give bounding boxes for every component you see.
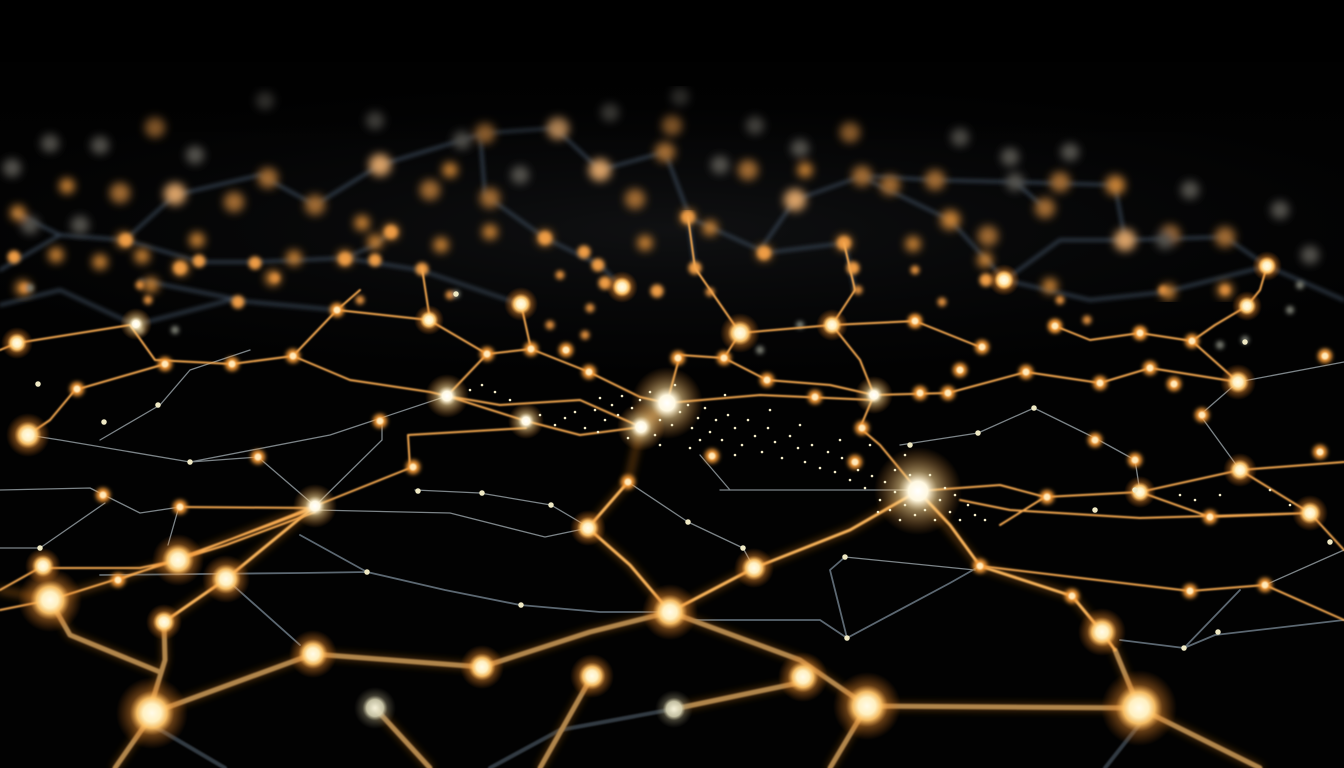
far blurred network lines: [0, 128, 1344, 325]
amber line glow: [0, 403, 1260, 768]
hub glows: [617, 367, 962, 535]
large glowing nodes: [1, 251, 1328, 749]
ambient haze behind far nodes: [0, 80, 1344, 380]
mid amber network lines: [0, 217, 1344, 620]
thick foreground amber lines: [50, 482, 1260, 768]
thin grey connecting lines: [0, 350, 1344, 768]
small pale nodes: [38, 294, 1330, 648]
darkening fade at top: [0, 0, 1344, 150]
mid-distance soft nodes: [14, 217, 1325, 355]
far blurred amber nodes: [12, 96, 1310, 292]
spark particles around hubs: [470, 385, 1290, 520]
small glowing amber nodes: [77, 310, 1325, 596]
